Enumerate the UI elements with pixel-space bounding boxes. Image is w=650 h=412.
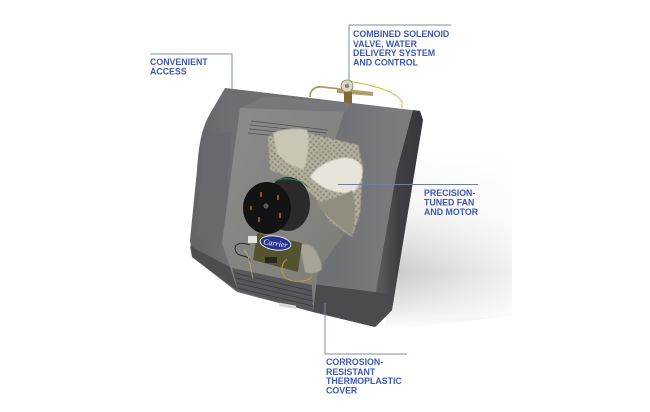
lower cover band, left xyxy=(190,246,238,291)
vents on top xyxy=(248,121,328,141)
fan blades xyxy=(273,129,362,273)
callout: solenoid valve: DELIVERY SYSTEM xyxy=(353,48,435,58)
callout: fan and motor: TUNED FAN xyxy=(424,198,474,208)
callout: fan and motor: AND MOTOR xyxy=(424,207,479,217)
cover shell xyxy=(190,88,423,327)
humidifier body xyxy=(190,88,423,327)
bottom grille xyxy=(232,268,313,312)
callout: convenient access: CONVENIENT xyxy=(150,57,208,67)
top ridge xyxy=(241,96,350,112)
bottom latch xyxy=(279,303,296,309)
callout: thermoplastic cover: COVER xyxy=(326,386,358,396)
callout: thermoplastic cover xyxy=(325,303,407,396)
mesh water panel xyxy=(268,131,363,237)
dark right side edge xyxy=(375,110,423,327)
solenoid valve and copper tubing xyxy=(310,80,402,108)
callout: convenient access xyxy=(150,54,232,90)
lower cover band, right xyxy=(313,284,392,327)
centre translucent panel xyxy=(222,103,363,312)
callout: thermoplastic cover: THERMOPLASTIC xyxy=(326,376,402,386)
carrier logo: Carrier xyxy=(263,237,289,250)
callout: solenoid valve xyxy=(349,25,451,80)
callout: convenient access: ACCESS xyxy=(150,66,187,76)
callout: solenoid valve: VALVE, WATER xyxy=(353,39,418,49)
callout: fan and motor: PRECISION- xyxy=(424,188,475,198)
callout: solenoid valve: COMBINED SOLENOID xyxy=(353,29,449,39)
callout: thermoplastic cover: RESISTANT xyxy=(326,367,376,377)
floor shadow behind the unit xyxy=(385,150,512,330)
fan motor xyxy=(243,177,310,234)
left recessed panel xyxy=(197,132,232,240)
callout: solenoid valve: AND CONTROL xyxy=(353,58,419,68)
callout: fan and motor xyxy=(338,184,479,217)
control circuit board xyxy=(235,233,312,281)
callout: thermoplastic cover: CORROSION- xyxy=(326,357,383,367)
